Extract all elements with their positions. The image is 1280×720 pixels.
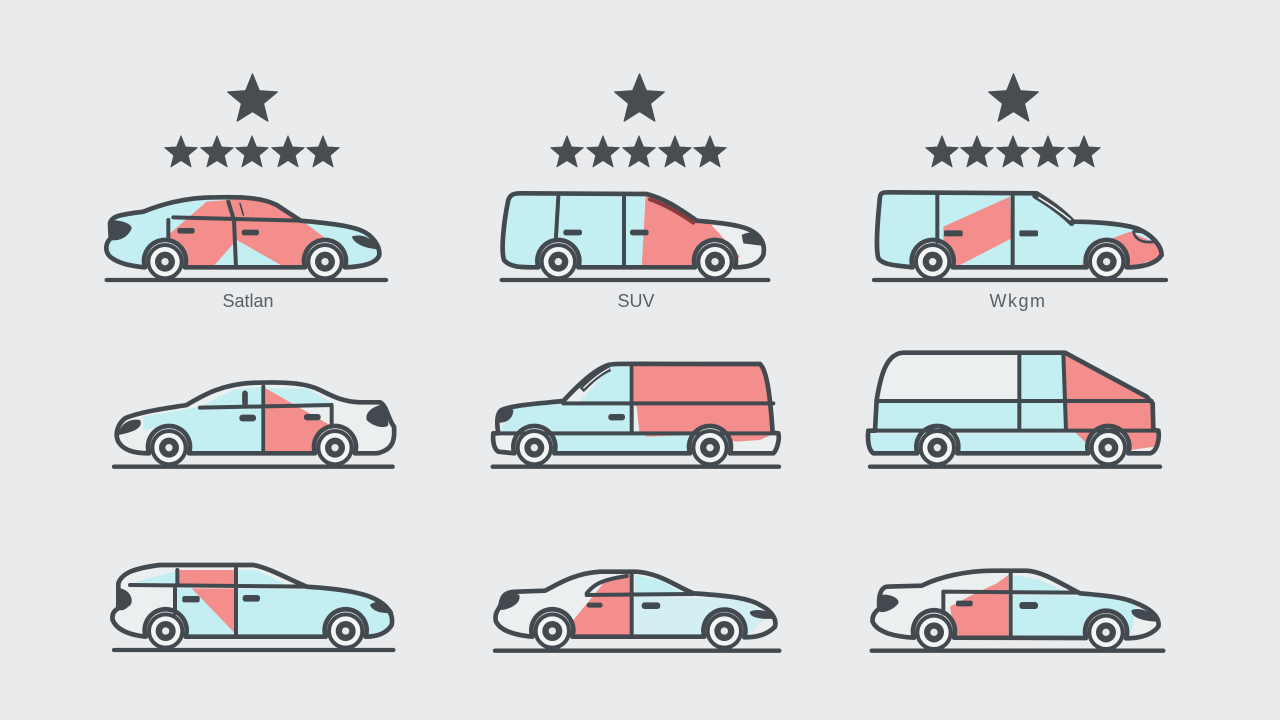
five star rating [926, 136, 1100, 167]
icon: large star [228, 74, 277, 121]
icon: sedan car [106, 197, 386, 280]
five star rating [551, 136, 726, 167]
label: SUV: SUV [617, 291, 655, 311]
panel: sedan rating [106, 74, 386, 311]
icon: SUV car [500, 190, 768, 280]
icon: large star [989, 74, 1038, 121]
icon: hatchback, bottom row left [112, 565, 393, 650]
panel: SUV rating [500, 74, 768, 311]
icon: large star [615, 74, 664, 121]
icon: minivan, middle row right [868, 353, 1160, 467]
panel: wagon rating [874, 74, 1166, 311]
icon: coupe car, middle row left [114, 382, 394, 467]
icon: sedan, bottom row right [872, 571, 1163, 651]
label: wagon: Wkgm [990, 291, 1046, 311]
label: sedan: Satlan [222, 291, 274, 311]
icon: van with red cargo, middle row centre [493, 364, 779, 467]
icon: wagon car [874, 192, 1166, 282]
icon: coupe, bottom row centre [495, 572, 779, 651]
five star rating [165, 136, 339, 167]
